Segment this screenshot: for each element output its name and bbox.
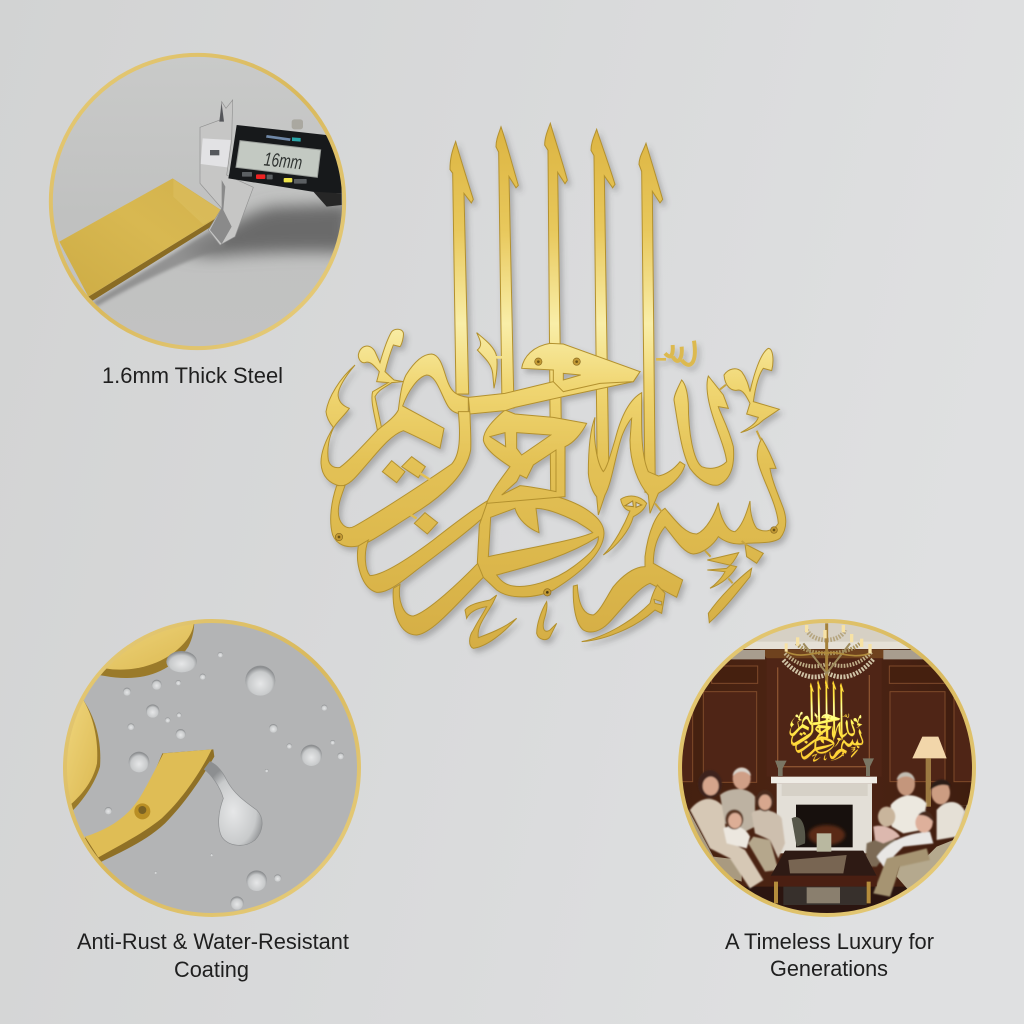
caption: timeless luxury xyxy=(725,929,934,981)
caption: timeless luxury: A Timeless Luxury for xyxy=(725,929,934,954)
leaf and upper sweep xyxy=(321,354,468,486)
circle panel: steel thickness xyxy=(48,52,346,350)
side urns xyxy=(775,758,874,776)
left half of the calligraphy xyxy=(321,329,640,648)
diamonds xyxy=(382,461,405,483)
swash xyxy=(477,333,497,388)
sin body xyxy=(573,438,786,632)
floor xyxy=(744,886,907,913)
right family xyxy=(865,772,965,897)
small ha with tail xyxy=(603,496,647,555)
room walls xyxy=(682,623,972,887)
gold calligraphy wall art xyxy=(321,123,786,648)
circle panel: family living room xyxy=(678,619,976,917)
crescent xyxy=(582,585,665,642)
cast shadow xyxy=(93,203,350,307)
water droplets xyxy=(105,651,344,910)
screw xyxy=(134,803,150,819)
right half of the calligraphy xyxy=(573,341,786,642)
gold plate xyxy=(59,178,226,301)
coffee table xyxy=(771,817,877,905)
caliper reading: 16mm xyxy=(263,149,303,174)
right sofa xyxy=(896,804,968,889)
circle panel: water resistance xyxy=(63,619,361,917)
vertical alif strokes xyxy=(450,123,663,496)
bottom swashes xyxy=(465,595,517,648)
gold ring xyxy=(65,621,359,915)
ring form xyxy=(477,492,604,597)
lower right ornaments xyxy=(745,544,763,563)
connector tabs xyxy=(655,385,761,583)
caliper jaws xyxy=(200,100,253,245)
horizontal bar xyxy=(468,372,640,414)
miniature wall art xyxy=(789,680,863,762)
caption: coating xyxy=(77,929,349,982)
central lattice xyxy=(483,410,587,503)
gold shapes xyxy=(67,624,214,862)
left sofa xyxy=(687,807,742,882)
bird head xyxy=(522,343,640,392)
gold ring xyxy=(51,55,344,348)
caption: coating: Coating xyxy=(174,957,249,982)
screws xyxy=(335,533,343,541)
hanging water drop xyxy=(204,762,262,845)
caption: steel thickness: 1.6mm Thick Steel xyxy=(102,363,283,388)
caption: coating: Anti-Rust & Water-Resistant xyxy=(77,929,349,954)
curl ornament xyxy=(358,329,403,430)
gold ring xyxy=(680,621,974,915)
second arc xyxy=(357,499,492,592)
chandelier xyxy=(783,623,874,686)
allah loop xyxy=(674,376,734,485)
screws xyxy=(573,358,580,365)
caption: timeless luxury: Generations xyxy=(770,956,888,981)
caliper body xyxy=(228,119,342,207)
lam sweeps xyxy=(588,393,685,515)
left family xyxy=(690,767,785,888)
shadda mark xyxy=(665,341,695,365)
long arc xyxy=(331,412,471,547)
third arc xyxy=(393,557,497,635)
upper right ornament xyxy=(724,348,779,433)
fireplace xyxy=(771,777,877,853)
floor lamp xyxy=(912,737,947,807)
